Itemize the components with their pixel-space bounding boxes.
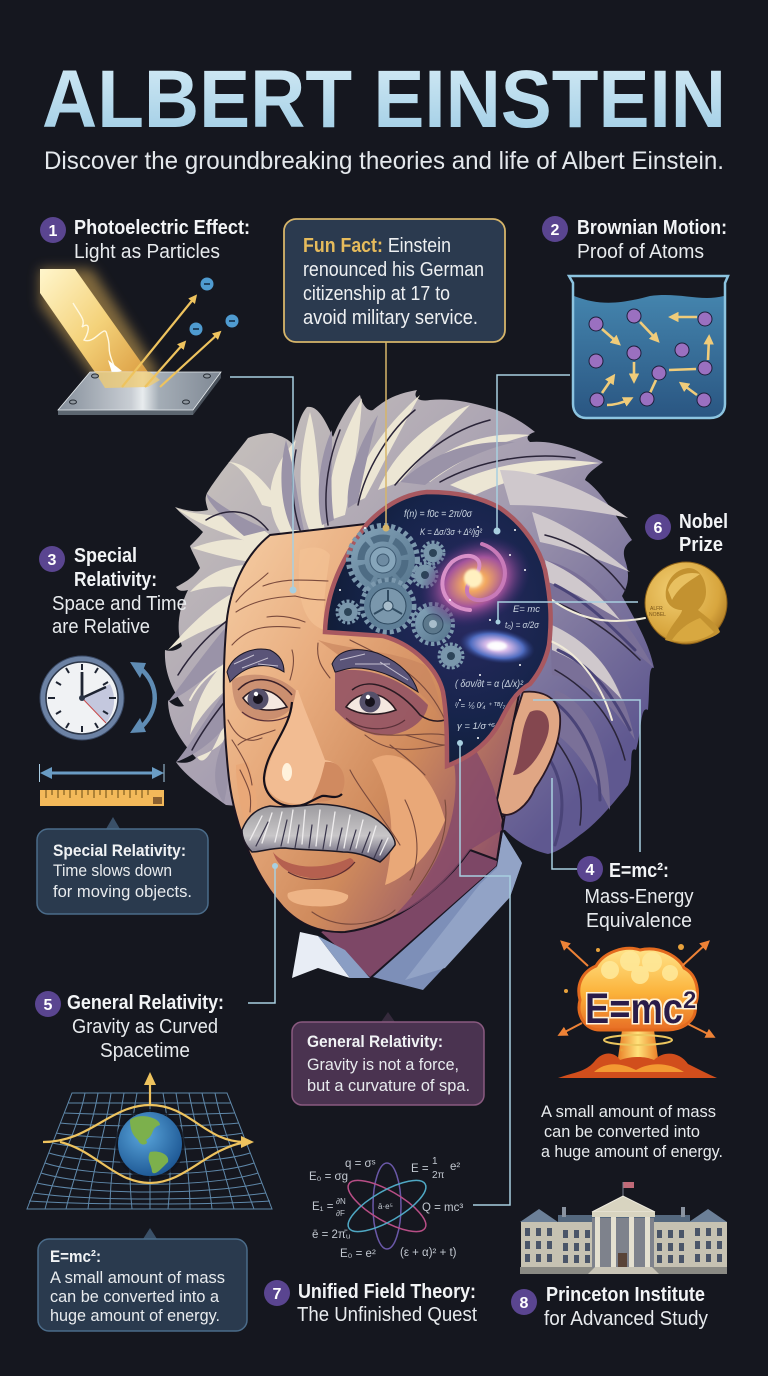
subheading: The Unfinished Quest (297, 1304, 477, 1326)
gear: right (413, 604, 453, 644)
lavender tufts (545, 560, 654, 810)
formulas: (ε + α)² + t) (400, 1247, 457, 1259)
panel: unified field theory (264, 1156, 477, 1326)
panel: mass-energy equivalence: Equivalence (586, 910, 692, 932)
dark strand lines (178, 410, 645, 845)
callout: E=mc2 (38, 1228, 247, 1331)
line: E=mc2 neck (552, 778, 578, 869)
sparks (564, 944, 684, 1052)
icon: gold medal: ALFR (650, 606, 663, 612)
right eyebrow (332, 650, 418, 692)
stars (339, 526, 526, 739)
text: mass to energy: can be converted into (544, 1122, 700, 1141)
formulas: 2π (432, 1170, 445, 1181)
icon: curved arrows (130, 662, 155, 733)
right eye (346, 684, 445, 729)
gear: large lower (362, 580, 414, 632)
brain formulas: E= mc (513, 604, 541, 614)
panel: photoelectric effect (40, 217, 250, 415)
wings (521, 1222, 727, 1269)
formulas (309, 1156, 463, 1260)
heading: E=mc²: (609, 860, 669, 882)
brain formulas: f(n) = f0c = 2π/0σ (404, 509, 473, 520)
formulas: Q = mc³ (422, 1202, 463, 1214)
face (224, 520, 540, 932)
brain formulas: ( δσv/∂t = α (Δ/x)² (455, 679, 524, 690)
title: ALBERT EINSTEIN (42, 54, 726, 145)
leader dots (272, 524, 500, 869)
badge 4 (577, 856, 603, 882)
formulas: E₀ = e² (340, 1248, 376, 1260)
icon: electrons (190, 278, 238, 336)
particles (589, 309, 712, 407)
windows (525, 1228, 722, 1263)
panel: nobel prize: Prize (679, 534, 723, 556)
collar (292, 832, 522, 990)
heading: Brownian Motion: (577, 217, 727, 239)
heading: Nobel (679, 511, 728, 533)
heading: Unified Field Theory: (298, 1281, 476, 1303)
line: photoelectric (230, 377, 293, 590)
formulas: ē = 2π̄ᵤ (312, 1229, 350, 1241)
callout: gravity is curvature: General Relativity: (307, 1032, 443, 1051)
icon: gold medal: NOBEL (649, 612, 666, 618)
icon: clock (40, 656, 124, 740)
callout: gravity is curvature (292, 1012, 484, 1105)
badge 5 (35, 991, 61, 1017)
cloud body (579, 948, 697, 1030)
brain formulas: γ = 1/σ⁺⁶ (457, 721, 495, 731)
line: E=mc2 ear (533, 700, 640, 852)
hair (165, 390, 654, 854)
neck (320, 815, 505, 978)
badge 2: 2 (551, 222, 560, 239)
lower lip and chin (273, 852, 355, 906)
callout: fun fact: citizenship at 17 to (303, 283, 450, 305)
panel: special relativity: Relativity: (74, 569, 157, 591)
callout: time slows down: Time slows down (53, 861, 172, 880)
subheading: Light as Particles (74, 241, 220, 263)
subheading: Space and Time (52, 593, 187, 615)
badge 2 (542, 216, 568, 242)
formulas: ∂N (336, 1197, 346, 1206)
arrow heads (144, 1072, 254, 1148)
eye socket shading (335, 670, 428, 735)
brain formulas: ᴵ/ = ⅟₀ 0⁄₄ ⁺ ᵀᴮ/₇ (455, 701, 506, 710)
heading: General Relativity: (67, 992, 224, 1014)
portico (592, 1218, 654, 1268)
gear: large top (349, 526, 417, 594)
panel: special relativity (37, 545, 208, 914)
icon: curved light paths (43, 1078, 245, 1183)
callout: fun fact (284, 219, 505, 342)
brain formulas (404, 509, 541, 731)
panel: general relativity: Spacetime (100, 1040, 190, 1062)
icon: spacetime grid (27, 1093, 272, 1209)
badge 3 (39, 546, 65, 572)
badge 8 (511, 1289, 537, 1315)
brain formulas: t₀) = σ/2σ (505, 620, 540, 630)
cheek shading (395, 700, 502, 915)
icon: beaker (569, 276, 728, 418)
line: nobel (498, 602, 638, 622)
panel: mass-energy equivalence (541, 856, 723, 1161)
left eye (238, 680, 292, 721)
badge 7 (264, 1280, 290, 1306)
formulas: E₁ = (312, 1201, 334, 1213)
panel: princeton institute (511, 1182, 727, 1330)
panel: nobel prize (645, 511, 728, 644)
equation text: E=mc (585, 985, 683, 1033)
formulas: q = σˢ (345, 1158, 376, 1170)
heading: Photoelectric Effect: (74, 217, 250, 239)
panel: brownian motion (542, 216, 728, 418)
leader lines (230, 342, 640, 1205)
callout: fun fact: Fun Fact: Einstein (303, 235, 451, 257)
icon: electron arrows (122, 297, 219, 387)
callout: E=mc2: A small amount of mass (50, 1268, 225, 1287)
icon: mushroom cloud (558, 943, 717, 1078)
formulas: E₀ = σg (309, 1171, 348, 1183)
panel: special relativity: are Relative (52, 616, 150, 638)
icon: building (520, 1182, 727, 1274)
badge 4: 4 (586, 862, 595, 879)
formulas: ∂F (336, 1209, 345, 1218)
gears (337, 526, 463, 668)
badge 5: 5 (44, 997, 53, 1014)
subheading: Proof of Atoms (577, 241, 704, 263)
motion arrows (602, 317, 709, 405)
spiral galaxy (405, 519, 545, 645)
cream tufts (168, 395, 600, 761)
icon: earth (115, 1109, 185, 1179)
line: general relativity (248, 866, 275, 1003)
formulas: E = (411, 1163, 429, 1175)
formulas: e² (450, 1161, 460, 1173)
text: mass to energy (541, 1102, 723, 1161)
badge 1 (40, 217, 66, 243)
badge 6: 6 (654, 520, 663, 537)
callout: gravity is curvature: but a curvature of spa. (307, 1076, 470, 1095)
grey tufts (168, 415, 515, 803)
ear (494, 692, 560, 815)
wrinkles (228, 573, 446, 924)
badge 1: 1 (49, 223, 58, 240)
callout: E=mc2: E=mc²: (50, 1247, 101, 1266)
moustache (242, 804, 395, 862)
badge 7: 7 (273, 1286, 282, 1303)
formulas: ā·e⁵ (378, 1202, 393, 1211)
callout: E=mc2: can be converted into a (50, 1287, 220, 1306)
callout: fun fact: renounced his German (303, 259, 484, 281)
heading: Princeton Institute (546, 1284, 705, 1306)
text: mass to energy: a huge amount of energy. (541, 1142, 723, 1161)
icon: metal plate (58, 372, 221, 415)
forehead highlight (299, 548, 330, 630)
callout: fun fact: avoid military service. (303, 307, 478, 329)
line: fun fact (385, 342, 387, 528)
callout: E=mc2: huge amount of energy. (50, 1306, 220, 1325)
heading: Special (74, 545, 137, 567)
callout: gravity is curvature: Gravity is not a force, (307, 1055, 459, 1074)
callout: time slows down: for moving objects. (53, 882, 192, 901)
arrows (561, 943, 712, 1036)
portrait: Einstein head with open mind (165, 390, 654, 990)
left eyebrow (227, 649, 284, 682)
flag (623, 1182, 634, 1188)
panel: general relativity (27, 991, 272, 1331)
badge 8: 8 (520, 1295, 529, 1312)
formulas: 1 (432, 1156, 438, 1167)
line: brownian (497, 375, 570, 531)
subheading: Mass-Energy (584, 886, 694, 908)
subheading: Gravity as Curved (72, 1016, 218, 1038)
pale strands (500, 470, 630, 700)
elliptical galaxy (457, 624, 537, 668)
nose (264, 690, 344, 806)
callout: time slows down (37, 817, 208, 914)
icon: light beam (40, 269, 160, 392)
icon: atom orbits (341, 1163, 433, 1249)
text: mass to energy: A small amount of mass (541, 1102, 716, 1121)
callout: time slows down: Special Relativity: (53, 841, 186, 860)
open skull: gears and galaxies (325, 492, 551, 766)
icon: ruler with arrow (40, 764, 164, 806)
subheading: for Advanced Study (544, 1308, 708, 1330)
connecting strokes (650, 369, 696, 393)
line: unified field (460, 743, 510, 1205)
brain formulas: K = Δσ/3σ + Δ²/jg² (420, 527, 483, 537)
equation text: 2 (683, 987, 696, 1014)
badge 3: 3 (48, 552, 57, 569)
gear: small cluster (337, 542, 463, 668)
icon: gold medal (645, 562, 727, 644)
subtitle: Discover the groundbreaking theories and life of Albert Einstein. (44, 147, 724, 175)
